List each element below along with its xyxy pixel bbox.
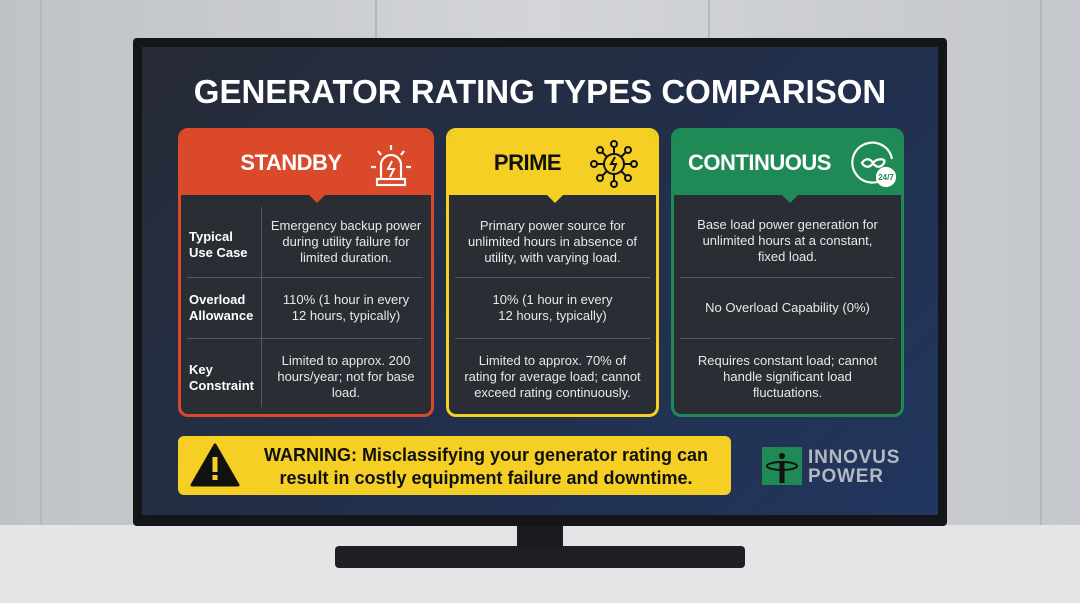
row labels: Use Case: [189, 245, 248, 260]
text: standby rows: Emergency backup power during utility failure for limited duration.: [271, 218, 421, 265]
text: continuous rows: fixed load.: [758, 249, 817, 264]
heading: continuous: [674, 131, 901, 195]
panel: standby: Limited to approx. 200 hours/year; not for base load.: [277, 353, 415, 400]
logo: innovus power: INNOVUS: [808, 447, 900, 468]
row labels: Typical: [189, 229, 233, 244]
icon: warning triangle: [190, 443, 240, 486]
panel: prime: Limited to approx. 70% of: [479, 353, 626, 368]
text: continuous rows: Base load power generation for: [697, 217, 878, 232]
tv stand: [335, 526, 745, 568]
icon: 24/7 infinity: 24/7: [878, 173, 894, 182]
tv bezel and screen: [133, 38, 947, 526]
heading: prime: PRIME: [494, 150, 561, 175]
panel: standby: [178, 128, 434, 417]
icon: 24/7 infinity: [851, 142, 896, 188]
panel: prime: 12 hours, typically): [498, 308, 607, 323]
callout: warning: WARNING: Misclassifying your generator rating can result in costly equipment failure and downtime.: [264, 445, 708, 488]
panel: prime: [446, 128, 659, 417]
panel: standby: 12 hours, typically): [292, 308, 400, 323]
icon: siren: [371, 145, 411, 186]
panel: continuous: [671, 128, 904, 417]
callout: warning: [178, 436, 731, 495]
heading: standby: [181, 131, 431, 195]
logo: innovus power: [762, 447, 900, 487]
text: prime rows: Primary power source for unlimited hours in absence of utility, with varying load.: [468, 218, 637, 265]
panel: prime: 10% (1 hour in every: [493, 292, 612, 307]
icon: hub: [590, 140, 638, 188]
heading: continuous: CONTINUOUS: [688, 150, 831, 175]
row labels: [189, 229, 248, 260]
panel: standby: 110% (1 hour in every: [283, 292, 409, 307]
panel: standby: Allowance: [189, 308, 253, 323]
logo: innovus power: POWER: [808, 466, 884, 487]
heading: standby: STANDBY: [240, 150, 342, 175]
table: [0, 525, 1080, 603]
title: GENERATOR RATING TYPES COMPARISON: [194, 73, 886, 110]
panel: continuous: No Overload Capability (0%): [705, 300, 870, 315]
text: continuous rows: [697, 217, 878, 264]
text: continuous rows: unlimited hours at a constant,: [703, 233, 872, 248]
heading: prime: [449, 131, 656, 195]
panel: standby: Constraint: [189, 378, 254, 393]
panel: continuous: Requires constant load; cannot handle significant load fluctuations.: [698, 353, 877, 400]
panel: standby: Key: [189, 362, 213, 377]
panel: standby: Overload: [189, 292, 245, 307]
panel: prime: rating for average load; cannot exceed rating continuously.: [464, 369, 641, 400]
